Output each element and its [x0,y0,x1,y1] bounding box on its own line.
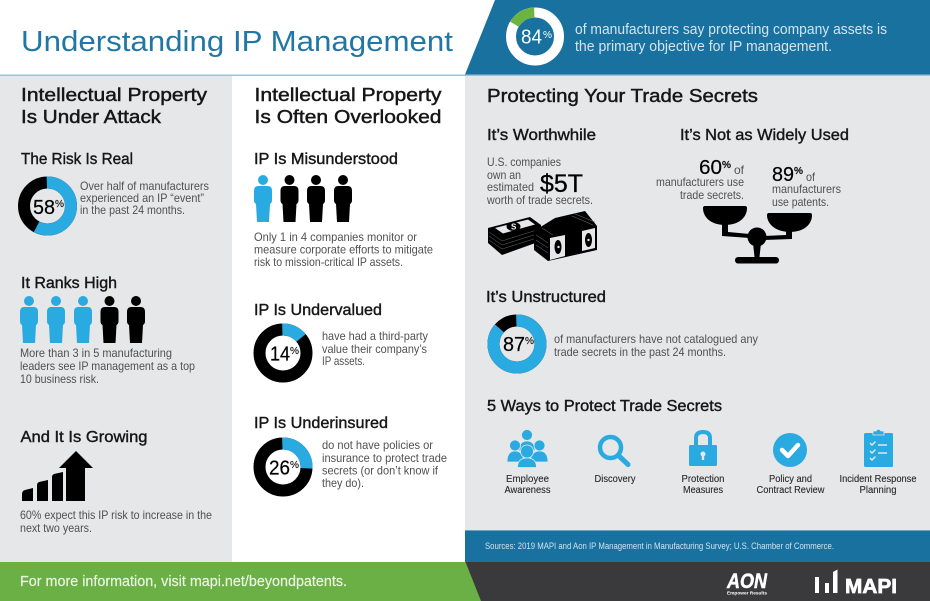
donut chart: 58%: % [55,198,64,210]
text: worth of trade secrets: $5T [540,170,583,198]
text: underinsured description [322,439,447,490]
label: Policy and [769,474,812,485]
header banner [465,0,930,74]
subheading: IP is misunderstood: IP Is Misunderstood [254,151,398,168]
text: risk description: in the past 24 months. [80,204,185,217]
icon: stacks of cash: S [511,222,517,232]
text: risk description: experienced an IP “event” [80,192,204,205]
text: unstructured description [554,333,758,359]
icon: group of people [507,430,548,468]
donut chart: 58% [24,182,71,230]
text: misunderstood description: measure corporate efforts to mitigate [254,244,433,256]
donut chart: 87%: 87 [503,334,525,356]
logo: Aon: Empower Results [727,590,768,596]
subheading: it's not as widely used: It’s Not as Widely Used [680,127,849,144]
header rule [0,74,930,76]
item: discovery [594,437,636,485]
subheading: it's unstructured: It’s Unstructured [486,289,606,306]
label [504,474,550,496]
donut chart: 87% [494,320,540,368]
middle column heading: Intellectual Property [254,84,442,105]
stat: 89% use patents: 89 [772,164,794,186]
donut chart: 84%: 84 [521,26,542,48]
stat: 89% use patents: use patents. [772,196,829,209]
background panel: middle column [232,75,465,562]
middle column heading [254,84,442,127]
label: Incident Response [840,474,917,485]
label: Awareness [504,485,550,496]
label: Protection [682,474,724,485]
logo: MAPI [815,570,897,598]
text: ranking description: leaders see IP management as a top [20,360,195,373]
panel: protecting your trade secrets [486,85,917,496]
text: misunderstood description: risk to mission-critical IP assets. [254,256,403,269]
donut chart: 87%: % [525,335,534,347]
icon: check mark circle [773,433,807,467]
label: Employee [506,474,549,485]
title: Understanding IP Management [21,26,453,58]
text: undervalued description: IP assets. [322,355,365,368]
sources bar: Sources: 2019 MAPI and Aon IP Management in Manufacturing Survey; U.S. Chamber of Commerce. [485,541,834,551]
icon: balance scale [703,206,812,264]
left column heading: Is Under Attack [21,106,162,127]
left column heading: Intellectual Property [21,84,208,105]
header statistic text [575,22,887,55]
footer link text: For more information, visit mapi.net/beyondpatents. [20,574,347,590]
label [840,474,917,496]
background panel: right column [465,75,930,531]
middle column heading: Is Often Overlooked [254,106,442,127]
background panel: left column [0,75,232,562]
subheading: it's worthwhile: It’s Worthwhile [487,127,596,144]
text: risk description: Over half of manufacturers [80,180,209,193]
stat: 60% use trade secrets: trade secrets. [680,189,744,202]
donut chart: 26%: % [290,459,299,471]
panel: intellectual property under attack [20,84,212,535]
icon: magnifying glass [600,437,628,464]
text: worth of trade secrets: worth of trade secrets. [486,194,593,207]
stat: 89% use patents [772,164,841,209]
label: Discovery [594,474,636,485]
donut chart: 14%: 14 [270,344,290,366]
text: misunderstood description: Only 1 in 4 companies monitor or [254,231,417,244]
subheading: IP is undervalued: IP Is Undervalued [254,302,382,319]
text: unstructured description: trade secrets in the past 24 months. [554,346,726,359]
item: policy and contract review [756,433,825,496]
stat: 89% use patents: manufacturers [772,183,841,196]
label [682,474,724,496]
text: worth of trade secrets [486,156,593,207]
panel: intellectual property overlooked [254,84,447,490]
icon: rising bars with arrow [22,451,93,501]
donut chart: 84%: % [543,30,552,41]
text: ranking description: 10 business risk. [20,373,99,386]
text: underinsured description: secrets (or don’t know if [322,464,439,478]
text: worth of trade secrets: estimated [487,181,534,194]
subheading: and it is growing: And It Is Growing [20,429,148,446]
label: Contract Review [756,485,825,496]
item: incident response planning [840,429,917,496]
text: worth of trade secrets: own an [487,169,521,182]
item: employee awareness [504,430,550,496]
header statistic text: the primary objective for IP management. [575,39,832,55]
text: undervalued description [322,330,428,368]
text: risk description [80,180,209,217]
text: underinsured description: do not have policies or [322,439,433,452]
header statistic text: of manufacturers say protecting company assets is [575,22,887,38]
donut chart: 26%: 26 [269,458,290,480]
text: underinsured description: they do). [322,477,364,490]
subheading: IP is underinsured: IP Is Underinsured [254,415,388,432]
text: ranking description [20,347,195,386]
label [756,474,825,496]
donut chart: 14% [260,330,306,376]
stat: 60% use trade secrets: manufacturers use [656,176,744,189]
subheading: it ranks high: It Ranks High [21,275,117,292]
icon: stacks of cash [488,211,597,261]
stat: 60% use trade secrets: of [734,164,745,177]
text: misunderstood description [254,231,433,269]
donut chart: 26% [260,444,306,490]
footer bar [0,562,930,601]
stat: 60% use trade secrets: % [722,159,732,171]
left column heading [21,84,208,127]
logo: Aon: AON [726,570,768,593]
text: undervalued description: value their company’s [322,343,427,356]
icon: four people, one highlighted [254,175,352,222]
donut chart: 84% [511,12,559,60]
subheading: 5 ways to protect trade secrets: 5 Ways to Protect Trade Secrets [487,398,722,415]
label: Measures [683,485,723,496]
stat: 60% use trade secrets: 60 [699,157,722,179]
stat: 60% use trade secrets [656,157,745,202]
icon: clipboard checklist [864,429,893,467]
stat: 89% use patents: % [794,165,804,177]
donut chart: 58%: 58 [33,197,55,219]
sources bar [465,530,930,562]
icon: five people, three highlighted [20,296,145,343]
text: worth of trade secrets: U.S. companies [487,156,561,169]
item: protection measures [682,432,724,496]
right column heading: Protecting Your Trade Secrets [487,85,758,106]
icon: padlock [689,432,717,466]
logo: MAPI: MAPI [845,576,897,598]
text: growth description: 60% expect this IP risk to increase in the [20,509,212,522]
text: growth description: next two years. [20,522,92,535]
donut chart: 14%: % [290,345,299,357]
stat: 89% use patents: of [806,171,816,184]
label: Planning [860,485,896,496]
text: underinsured description: insurance to protect trade [322,452,447,465]
text: ranking description: More than 3 in 5 manufacturing [20,347,172,360]
subheading: the risk is real: The Risk Is Real [21,151,133,168]
text: undervalued description: have had a third-party [322,330,428,343]
text: unstructured description: of manufacturers have not catalogued any [554,333,758,346]
text: growth description [20,509,212,535]
